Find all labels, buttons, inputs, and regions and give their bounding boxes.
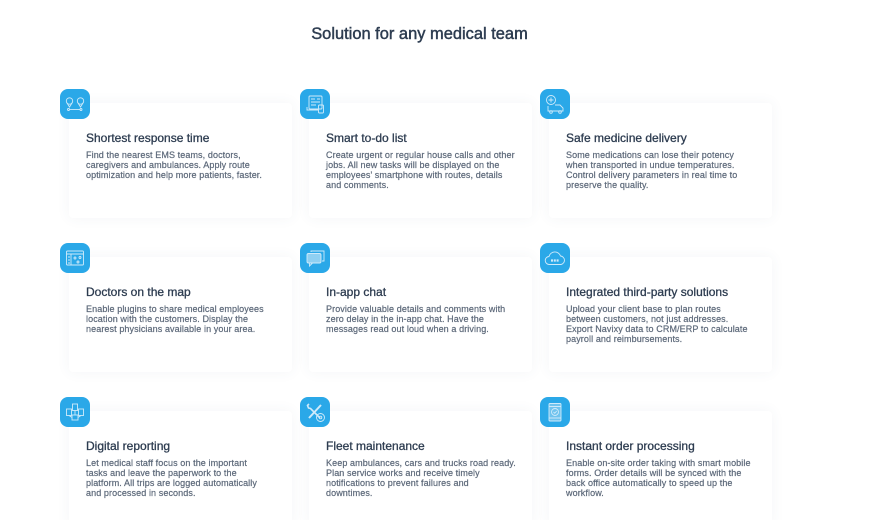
text block: downtimes. <box>326 488 373 498</box>
text block: Create urgent or regular house calls and other <box>326 150 515 160</box>
text block: when transported in undue temperatures. <box>566 160 735 170</box>
text block: Enable on-site order taking with smart mobile <box>566 458 751 468</box>
text block <box>86 304 264 334</box>
heading: In-app chat <box>326 285 386 299</box>
icon: map window <box>60 243 90 273</box>
text block: Find the nearest EMS teams, doctors, <box>86 150 241 160</box>
text block: and processed in seconds. <box>86 488 196 498</box>
icon: CRM cloud <box>540 243 570 273</box>
text block: messages read out loud when a driving. <box>326 324 489 334</box>
text block: Upload your client base to plan routes <box>566 304 721 314</box>
icon: ambulance with cross <box>540 89 570 119</box>
text block: jobs. All new tasks will be displayed on the <box>326 160 500 170</box>
text block: Plan service works and receive timely <box>326 468 480 478</box>
panel: integrated third-party solutions <box>540 243 748 344</box>
text block <box>566 150 737 190</box>
heading: Instant order processing <box>566 439 695 453</box>
heading: Safe medicine delivery <box>566 131 687 145</box>
panel: doctors on the map <box>60 243 264 334</box>
text block <box>86 458 257 498</box>
text block: and comments. <box>326 180 389 190</box>
icon: smartphone with check <box>540 397 570 427</box>
text block: workflow. <box>566 488 604 498</box>
text block: forms. Order details will be synced with the <box>566 468 741 478</box>
text block: optimization and help more patients, faster. <box>86 170 262 180</box>
panel: fleet maintenance <box>300 397 516 498</box>
text block: payroll and reimbursements. <box>566 334 682 344</box>
text block <box>326 304 505 334</box>
heading: Fleet maintenance <box>326 439 425 453</box>
title: Solution for any medical team <box>311 25 528 43</box>
heading: Shortest response time <box>86 131 209 145</box>
heading: Doctors on the map <box>86 285 191 299</box>
text block <box>326 458 516 498</box>
icon: linked documents <box>60 397 90 427</box>
text block <box>566 304 748 344</box>
text block: Enable plugins to share medical employees <box>86 304 264 314</box>
panel: in-app chat <box>300 243 505 334</box>
text block: Let medical staff focus on the important <box>86 458 247 468</box>
panel: instant order processing <box>540 397 751 498</box>
icon: crossed tools <box>300 397 330 427</box>
icon: chat bubbles <box>300 243 330 273</box>
heading: Integrated third-party solutions <box>566 285 728 299</box>
text block: Keep ambulances, cars and trucks road ready. <box>326 458 516 468</box>
icon: task list on devices <box>300 89 330 119</box>
text block: location with the customers. Display the <box>86 314 248 324</box>
text block: notifications to prevent failures and <box>326 478 469 488</box>
text block: Control delivery parameters in real time to <box>566 170 737 180</box>
text block: preserve the quality. <box>566 180 648 190</box>
text block: Some medications can lose their potency <box>566 150 734 160</box>
text block: tasks and leave the paperwork to the <box>86 468 237 478</box>
text block <box>566 458 751 498</box>
text block: employees’ smartphone with routes, details <box>326 170 502 180</box>
panel: shortest response time <box>60 89 262 180</box>
panel: digital reporting <box>60 397 257 498</box>
text block: between customers, not just addresses. <box>566 314 728 324</box>
text block <box>86 150 262 180</box>
heading: Smart to-do list <box>326 131 407 145</box>
panel: safe medicine delivery <box>540 89 737 190</box>
text block: back office automatically to speed up the <box>566 478 733 488</box>
text block: Provide valuable details and comments with <box>326 304 505 314</box>
text block: zero delay in the in-app chat. Have the <box>326 314 484 324</box>
icon: route pins <box>60 89 90 119</box>
text block: Export Navixy data to CRM/ERP to calculate <box>566 324 748 334</box>
heading: Digital reporting <box>86 439 170 453</box>
text block <box>326 150 515 190</box>
panel: smart to-do list <box>300 89 515 190</box>
text block: nearest physicians available in your area. <box>86 324 255 334</box>
text block: caregivers and ambulances. Apply route <box>86 160 250 170</box>
text block: platform. All trips are logged automatically <box>86 478 257 488</box>
